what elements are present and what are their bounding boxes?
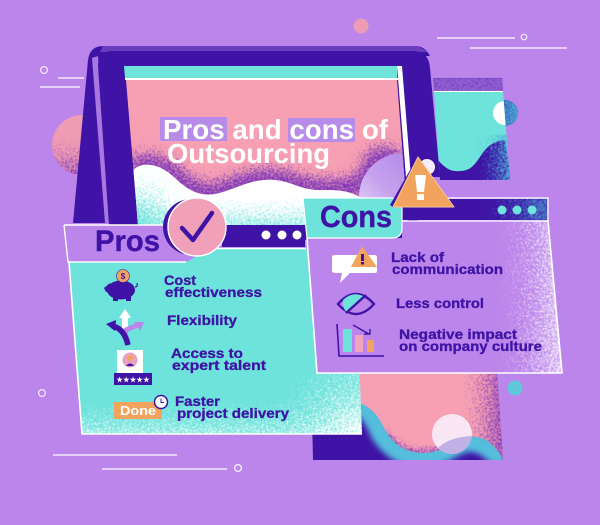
pros list text: project delivery <box>177 406 290 421</box>
title: Outsourcing <box>167 138 330 169</box>
icon: branching arrows <box>106 309 144 345</box>
lower tablet panel <box>311 372 504 462</box>
icon: done badge with clock <box>114 396 168 419</box>
panel: cons <box>303 157 565 374</box>
pros list text: effectiveness <box>165 285 262 300</box>
pros window bar <box>222 226 305 247</box>
pros list text: Faster <box>175 394 221 409</box>
cons header tab <box>303 198 402 238</box>
pink area <box>358 372 503 459</box>
icon: warning triangle <box>390 157 454 208</box>
decorative dots and lines <box>39 18 567 471</box>
cons list text: Negative impact <box>399 327 518 342</box>
pink globe behind tablet <box>52 115 83 175</box>
panel: pros <box>64 198 369 435</box>
icon: expert talent card: ★★★★★ <box>116 376 150 384</box>
cons window bar <box>400 199 547 220</box>
right back window <box>433 78 520 182</box>
pros list text: Access to <box>171 346 243 361</box>
cons list text: Less control <box>396 296 484 311</box>
title <box>160 114 389 169</box>
cons list text: communication <box>392 262 503 277</box>
pale disc <box>432 414 472 454</box>
cons list text: on company culture <box>399 339 543 354</box>
pros list text: expert talent <box>172 358 267 373</box>
icon: done badge with clock: Done <box>120 403 156 418</box>
icon: piggy bank <box>104 270 137 301</box>
tablet screen <box>124 66 410 225</box>
icon: declining bar chart <box>337 324 384 356</box>
icon: expert talent card <box>114 350 152 385</box>
title: Pros and cons of <box>163 114 389 145</box>
icon: speech bubble warning <box>332 246 377 283</box>
pros heading: Pros <box>95 225 160 258</box>
tablet body <box>73 46 440 240</box>
pros list text: Cost <box>164 273 197 288</box>
pros list text <box>164 273 290 421</box>
white wave <box>132 165 362 230</box>
cons heading: Cons <box>320 199 392 234</box>
pros list text: Flexibility <box>167 313 238 328</box>
pros header tab <box>64 225 200 262</box>
cons list text: Lack of <box>391 250 445 265</box>
lavender bubble <box>359 153 408 220</box>
screen header <box>124 66 397 78</box>
icon: crossed eye <box>338 294 374 314</box>
icon: piggy bank: $ <box>121 272 126 281</box>
icon: check badge <box>163 198 226 256</box>
cons list text <box>391 250 543 354</box>
